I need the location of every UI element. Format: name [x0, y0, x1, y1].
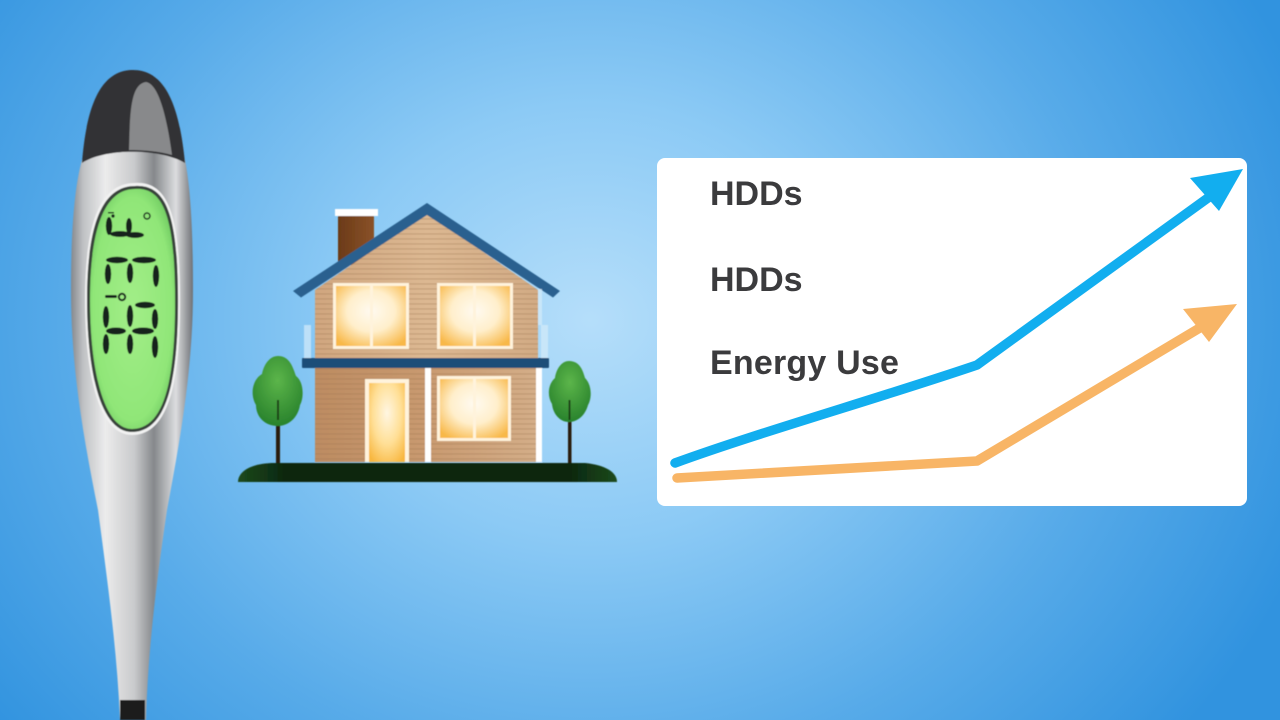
panel: line chart: [657, 158, 1247, 506]
floor band: [302, 358, 549, 368]
icon: digital thermometer: [71, 70, 193, 720]
line with arrow: HDDs: [675, 169, 1243, 463]
thermometer display: [85, 183, 180, 435]
white pillars: [425, 368, 542, 462]
thermometer cap: [82, 70, 185, 163]
chimney: [335, 209, 378, 265]
window: upper left: [333, 283, 409, 349]
window: lower right: [437, 376, 511, 441]
label: HDDs: HDDs: [710, 175, 803, 213]
display digits: [103, 212, 159, 358]
window: upper right: [437, 283, 513, 349]
roof: [293, 203, 560, 298]
label: HDDs: HDDs: [710, 261, 803, 299]
house walls: [315, 213, 538, 462]
tree: left: [253, 356, 303, 463]
ground: [238, 463, 617, 482]
balcony railings: [304, 289, 548, 359]
tree: right: [549, 361, 591, 463]
line with arrow: energy use: [677, 304, 1237, 478]
label: Energy Use: Energy Use: [710, 344, 899, 382]
thermometer tip: [120, 700, 145, 720]
door: [365, 379, 409, 462]
icon: house: [238, 203, 617, 482]
thermometer body: [71, 146, 193, 720]
